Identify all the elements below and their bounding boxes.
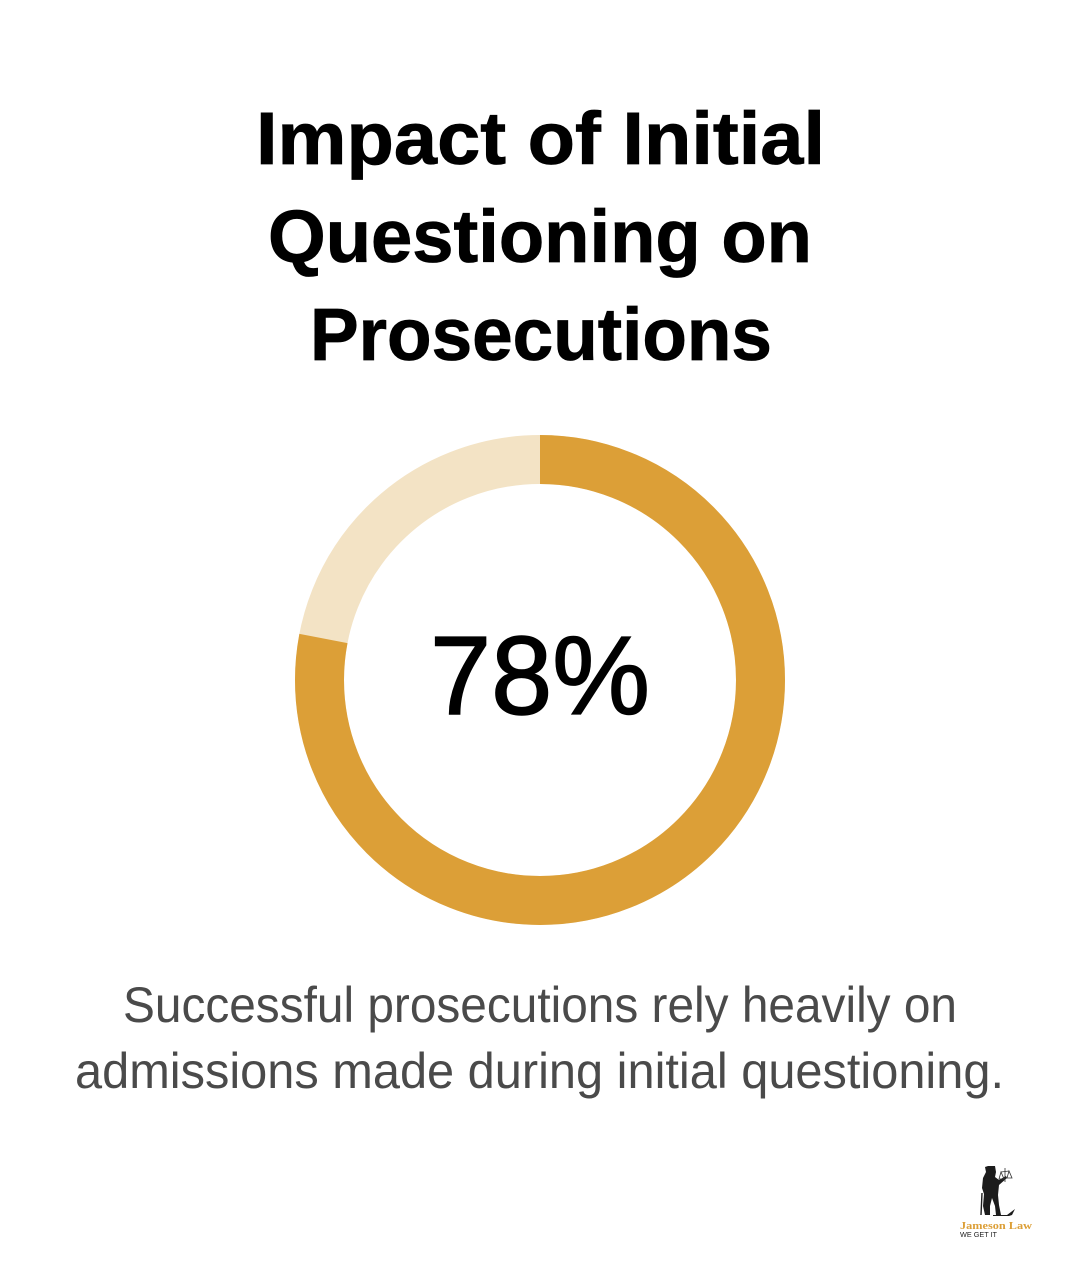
description text: admissions made during initial questioning. (75, 1043, 1004, 1099)
title (256, 97, 825, 376)
title: Impact of Initial (256, 97, 825, 180)
icon: lady justice with scales (981, 1166, 1015, 1216)
description text (75, 977, 1004, 1099)
donut chart: 78% (320, 460, 760, 900)
description text: Successful prosecutions rely heavily on (123, 977, 957, 1033)
title: Prosecutions (310, 293, 772, 376)
logo: Jameson Law (960, 1166, 1032, 1239)
donut value: 78% (430, 614, 650, 738)
logo name: Jameson Law (960, 1220, 1032, 1232)
title: Questioning on (268, 195, 812, 278)
logo tagline: WE GET IT (960, 1230, 997, 1239)
